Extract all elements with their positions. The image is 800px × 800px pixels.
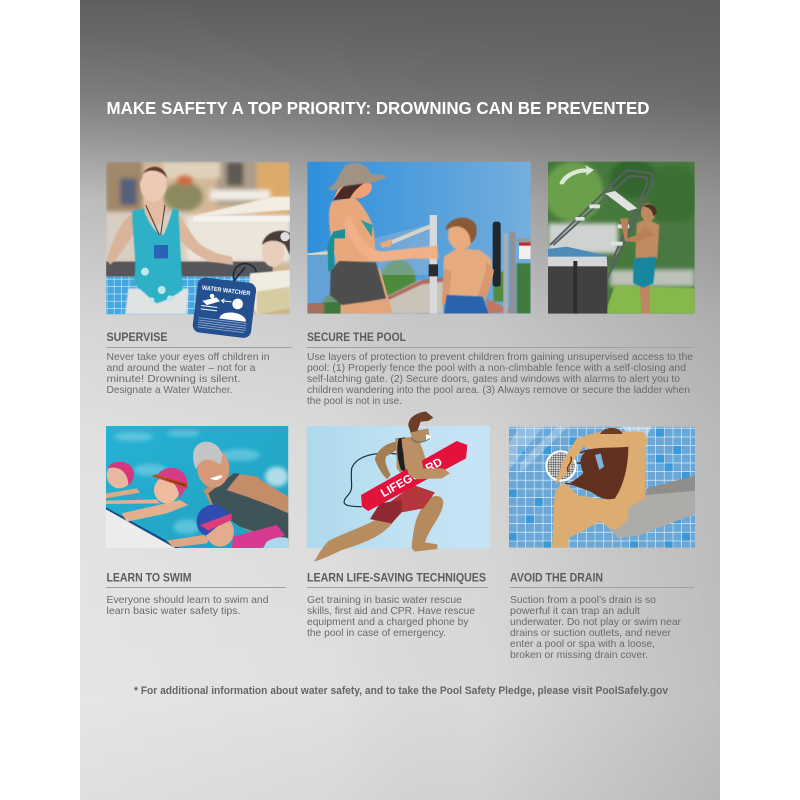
boy: [443, 248, 492, 298]
text: life-saving: the pool in case of emergency.: [307, 627, 446, 639]
text: avoid the drain: enter a pool or spa with a loose,: [510, 638, 655, 650]
text: life-saving: [307, 594, 475, 639]
text: avoid the drain: powerful it can trap an adult: [510, 605, 640, 617]
rescue tube with label: LIFEGUARD: [378, 455, 445, 500]
torso: [395, 437, 428, 488]
text: secure the pool: the pool is not in use.: [307, 395, 402, 407]
pool wall: [106, 262, 273, 277]
neck and head: [143, 198, 163, 226]
legs and splash: [125, 288, 188, 314]
divider swim: [106, 587, 286, 588]
text: secure the pool: [307, 351, 693, 407]
rear arm: [375, 442, 397, 479]
heading: supervise: SUPERVISE: [106, 332, 168, 344]
text: avoid the drain: broken or missing drain cover.: [510, 649, 648, 661]
text: supervise: minute! Drowning is silent.: [106, 373, 240, 385]
divider techniques: [307, 587, 488, 588]
fence panel: [307, 224, 431, 303]
title: MAKE SAFETY A TOP PRIORITY: DROWNING CAN BE PREVENTED: [106, 98, 650, 118]
text: supervise: [106, 351, 270, 396]
text: life-saving: equipment and a charged phone by: [307, 616, 469, 628]
body and arms: [552, 432, 647, 553]
child 3: [167, 505, 288, 548]
divider secure: [307, 347, 694, 348]
pool deck: [106, 508, 178, 548]
shoulder strap: [397, 437, 406, 472]
ladder: [550, 170, 653, 278]
heading: avoid the drain: AVOID THE DRAIN: [510, 572, 603, 584]
child 1: [106, 462, 140, 498]
illustration: lifeguard running with rescue tube: [307, 412, 490, 562]
tag: Water Watcher: WATER WATCHER: [202, 285, 251, 297]
rescue line: [344, 453, 397, 507]
lawn: [605, 285, 695, 314]
rear leg: [314, 520, 393, 562]
text: avoid the drain: drains or suction outlets, and never: [510, 627, 671, 639]
divider drain: [510, 587, 694, 588]
text: life-saving: skills, first aid and CPR. Have rescue: [307, 605, 475, 617]
rescue tube with label: [361, 441, 467, 511]
hat: [328, 163, 387, 190]
child 2: [106, 468, 188, 522]
text: learn to swim: Everyone should learn to swim and: [106, 594, 269, 606]
heading: secure the pool: SECURE THE POOL: [307, 332, 406, 344]
photo: secure the pool, woman and boy at fence: [307, 162, 531, 319]
photo: secure the pool, ladder removal: [543, 158, 700, 314]
footnote: * For additional information about water safety, and to take the Pool Safety Pledge, please visit PoolSafely.gov: [134, 685, 668, 697]
trees and house: [307, 260, 531, 319]
text: life-saving: Get training in basic water rescue: [307, 594, 462, 606]
text: learn to swim: [106, 594, 269, 617]
head and whistle: [408, 412, 433, 443]
arms: [106, 214, 134, 266]
text: supervise: Never take your eyes off children in: [106, 351, 270, 363]
text: secure the pool: children wandering into the pool area. (3) Always remove or secure the ladder when: [307, 384, 690, 396]
woman: [329, 197, 375, 263]
fence poles: [430, 215, 437, 314]
swimsuit: [132, 208, 183, 303]
girl: [248, 270, 290, 314]
text: secure the pool: pool: (1) Properly fence the pool with a non-climbable fence with a self-closing and: [307, 362, 686, 374]
curved arrow: [559, 165, 594, 184]
heading: learn life-saving techniques: LEARN LIFE-SAVING TECHNIQUES: [307, 572, 486, 584]
front leg: [412, 496, 443, 552]
man: [635, 218, 659, 258]
swimsuit lower body: [646, 476, 695, 495]
instructor: [193, 442, 288, 543]
text: learn to swim: learn basic water safety tips.: [106, 605, 240, 617]
hair: [600, 428, 623, 434]
photo: learn to swim: [106, 426, 288, 548]
text: secure the pool: Use layers of protection to prevent children from gaining unsupervised access to the: [307, 351, 693, 363]
tile strip: [106, 277, 253, 314]
above-ground pool: [548, 246, 607, 260]
divider supervise: [106, 347, 292, 348]
shorts: [370, 485, 435, 523]
text: avoid the drain: underwater. Do not play or swim near: [510, 616, 681, 628]
text: avoid the drain: Suction from a pool’s drain is so: [510, 594, 656, 606]
tag: Water Watcher: [192, 258, 259, 339]
heading: learn to swim: LEARN TO SWIM: [106, 572, 192, 584]
text: supervise: Designate a Water Watcher.: [106, 384, 232, 396]
text: supervise: and around the water – not for a: [106, 362, 256, 374]
text: secure the pool: self-latching gate. (2) Secure doors, gates and windows with alarms to alert you to: [307, 373, 680, 385]
front arm: [402, 438, 450, 479]
illustration: avoid the drain: [509, 427, 697, 553]
photo: supervise, woman in pool with Water Watcher tag: [106, 162, 290, 339]
tile colour variation: [509, 429, 690, 549]
text: avoid the drain: [510, 594, 681, 661]
light streaks: [509, 427, 568, 473]
foam on swimsuit: [141, 268, 173, 303]
drain cover: [545, 450, 577, 482]
gap in hair: [595, 453, 604, 470]
